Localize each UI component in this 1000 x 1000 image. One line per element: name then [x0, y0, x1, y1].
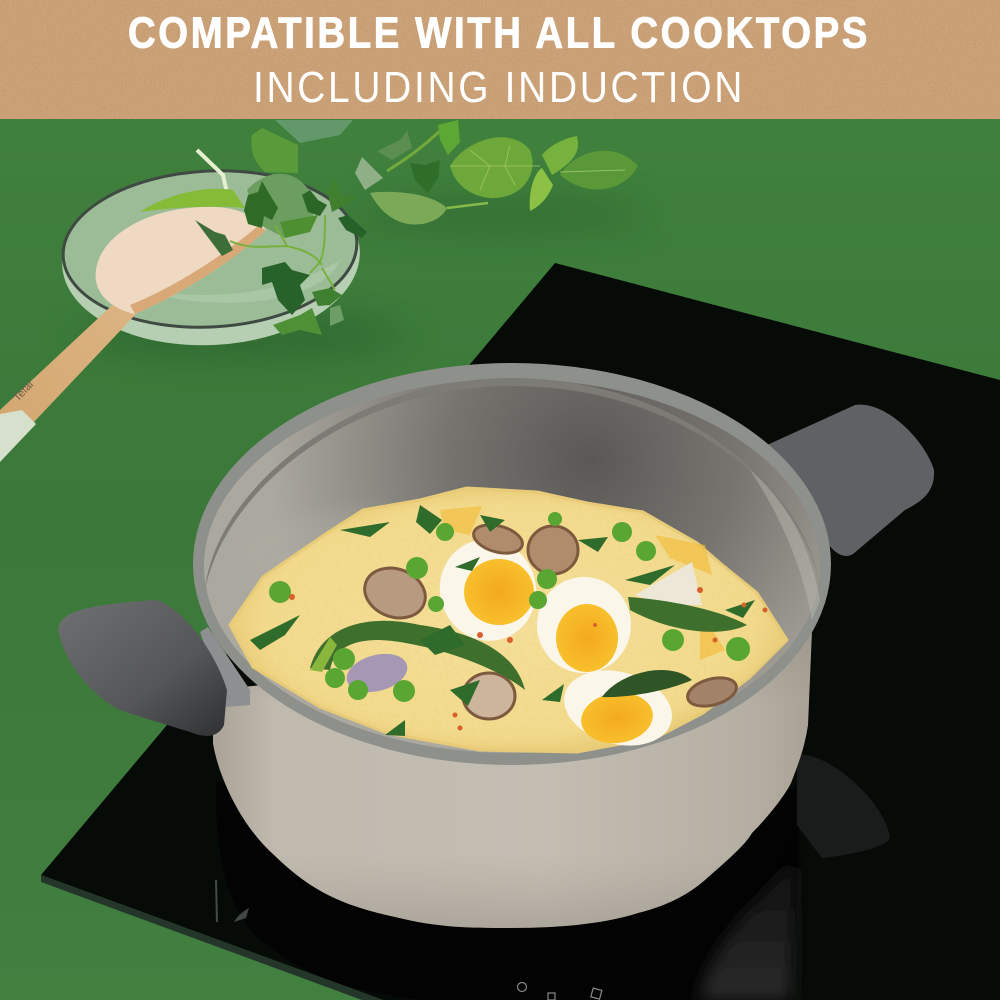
- herbs: parsley on plate: [140, 120, 367, 335]
- shadow under plate and herbs: [70, 199, 650, 361]
- right handle: [767, 405, 934, 556]
- peas: [269, 512, 750, 702]
- pot body: [213, 630, 812, 928]
- asparagus: [310, 597, 747, 697]
- plate: [58, 163, 364, 353]
- left handle: [58, 600, 227, 736]
- cooktop controls: [518, 982, 602, 1000]
- induction cooktop: [41, 263, 1000, 1000]
- herbs: basil: [355, 120, 638, 224]
- chili flecks: [289, 587, 768, 730]
- eggs: [428, 528, 680, 757]
- radish wedge and shallot: [342, 562, 702, 698]
- handle bracket: [200, 627, 250, 707]
- subheading: including induction: INCLUDING INDUCTION: [253, 63, 745, 112]
- wooden spoon: [0, 207, 266, 462]
- reflection highlight: [700, 830, 796, 1000]
- herb flecks: [250, 505, 755, 736]
- mushrooms: [358, 520, 740, 719]
- banner: kraft paper header: [0, 0, 1000, 119]
- wooden spoon: Tefal: [11, 379, 36, 404]
- pot reflection on cooktop: [216, 780, 799, 1000]
- pot: [58, 363, 934, 928]
- food: polenta: [220, 480, 800, 760]
- rim and inside: [193, 363, 831, 765]
- rear handle reflection: [797, 755, 890, 858]
- heading: compatible with all cooktops: COMPATIBLE WITH ALL COOKTOPS: [128, 8, 870, 58]
